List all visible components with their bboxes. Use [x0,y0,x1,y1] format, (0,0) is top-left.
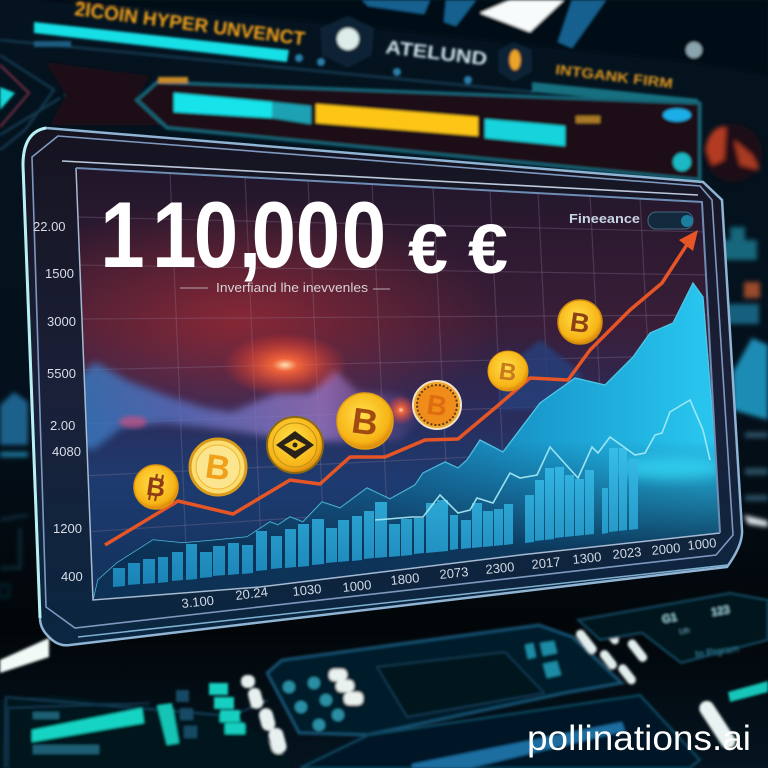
light flare [226,335,344,396]
panel frame [23,128,742,645]
coin 5: B [425,389,449,422]
coin 2 [190,439,246,495]
coin 7: B [568,307,592,339]
second top edge [62,161,698,195]
teal strip [532,82,698,107]
circuit lines [0,40,534,150]
x axis labels: 2017 [531,554,561,572]
teal meter [32,708,144,742]
bright blue strip [412,722,625,768]
right data panel: 123 [710,604,731,619]
coin 4: B [349,399,381,444]
teal segments [209,683,245,734]
white capsule [696,698,738,751]
area chart [93,283,722,602]
grey indicator [686,42,702,58]
arrow head [679,230,698,251]
colored status bars [174,93,565,146]
heading: top left: 2ICOIN HYPER UNVENCT [73,0,306,50]
bright left edge [23,128,46,618]
red hexagon outline [0,65,29,127]
right blurred side display [704,124,768,527]
glow band [615,457,725,479]
dim blue segments [176,690,197,738]
coin 6 [488,351,528,391]
front line series [375,400,710,520]
coin 4 [337,393,393,449]
vertical meter [157,703,179,745]
x axis labels: 20.24 [235,584,269,603]
top blue lights [362,0,606,48]
left control panel [0,675,290,768]
small flare [388,396,414,424]
small readouts [525,641,561,678]
outer bright lower line [78,565,727,637]
maroon backdrop [45,62,167,125]
status dots [295,54,472,84]
right teal meter [728,681,768,702]
grid lines [78,174,710,542]
x axis labels [181,535,717,611]
pink spot [119,416,147,428]
lower right panel outline [300,695,700,768]
y axis labels: 400 [61,569,83,584]
coin 1: B [145,471,167,503]
coin 3 [267,417,323,473]
x axis labels: 2000 [651,540,681,558]
small amber badge [498,42,532,82]
inner screen [377,652,544,717]
coin 6: B [497,358,518,387]
right hill [500,340,590,410]
plot area [77,169,719,600]
x axis labels: 1000 [687,535,717,553]
cyan progress bar [34,22,289,62]
x axis labels: 1030 [292,581,322,599]
dot grid [283,677,344,731]
tiny blue label [34,41,71,47]
red trend line [105,230,698,545]
lines [0,515,28,568]
top white light [480,0,564,32]
heading: centre: ATELUND [384,37,488,70]
x axis labels: 3.100 [181,593,215,611]
finance label: Fineeance [569,211,640,226]
cyan stripe [0,452,28,457]
x axis labels: 1000 [342,577,372,595]
white spot [744,515,768,527]
finance button [648,212,693,229]
x axis labels: 2073 [439,564,469,582]
x axis labels: 1800 [390,570,420,588]
hexagon badge [320,16,374,68]
left blurred side display [0,392,28,597]
right data panel: G1 [661,612,678,626]
x axis labels: 2300 [485,559,515,577]
bottom interface [0,593,768,768]
white squares [329,669,363,705]
small amber label [158,77,188,83]
blue blob [717,304,759,324]
background wave chart [40,362,425,450]
y axis labels: 1200 [53,521,82,536]
orange tag [744,282,760,298]
right data panel: In Prgram [695,644,740,661]
axis lines [76,168,720,600]
hint box [0,585,9,597]
cyan side icon [0,87,15,110]
y axis labels: 22.00 [33,219,66,234]
headline euro signs: € € [408,210,508,288]
red glow [80,211,473,414]
heading: right: INTGANK FIRM [555,61,674,91]
status panel [137,82,700,180]
right white pills [574,622,649,686]
blue wave [0,392,28,445]
top interface band [0,0,768,180]
x axis labels: 2023 [612,544,642,562]
headline value: 110,000 [100,183,386,287]
faint labels [33,712,99,754]
watermark: pollinations.ai [527,719,751,758]
x axis labels: 1300 [572,549,602,567]
coin 1 [134,465,178,509]
bar chart [113,448,638,587]
area shadow [94,447,719,600]
y axis labels: 2.00 [50,418,75,433]
y axis labels [33,219,83,584]
plot top edge [76,168,720,533]
subtitle: Inverfiand lhe inevvenles [216,280,369,295]
coin 7 [558,300,602,344]
light stripes [745,432,768,501]
white pills [241,675,288,755]
coin 5 [413,381,461,429]
y axis labels: 1500 [45,266,74,281]
upper dark panel [0,0,768,75]
centre control panel [267,625,622,735]
y axis labels: 3000 [47,314,76,329]
y axis labels: 4080 [52,444,81,459]
y axis labels: 5500 [47,366,76,381]
right data panel [578,593,768,663]
coin 2: B [203,447,233,489]
teal bars [717,227,757,260]
main chart panel [0,128,742,645]
red gauge [704,124,762,182]
amber tag [576,116,600,123]
teal circle [673,153,691,171]
bright mountain [733,338,768,420]
blue light [663,108,691,122]
right data panel: Lth [679,627,690,636]
inner frame line [32,136,733,628]
left white bar [0,638,49,673]
